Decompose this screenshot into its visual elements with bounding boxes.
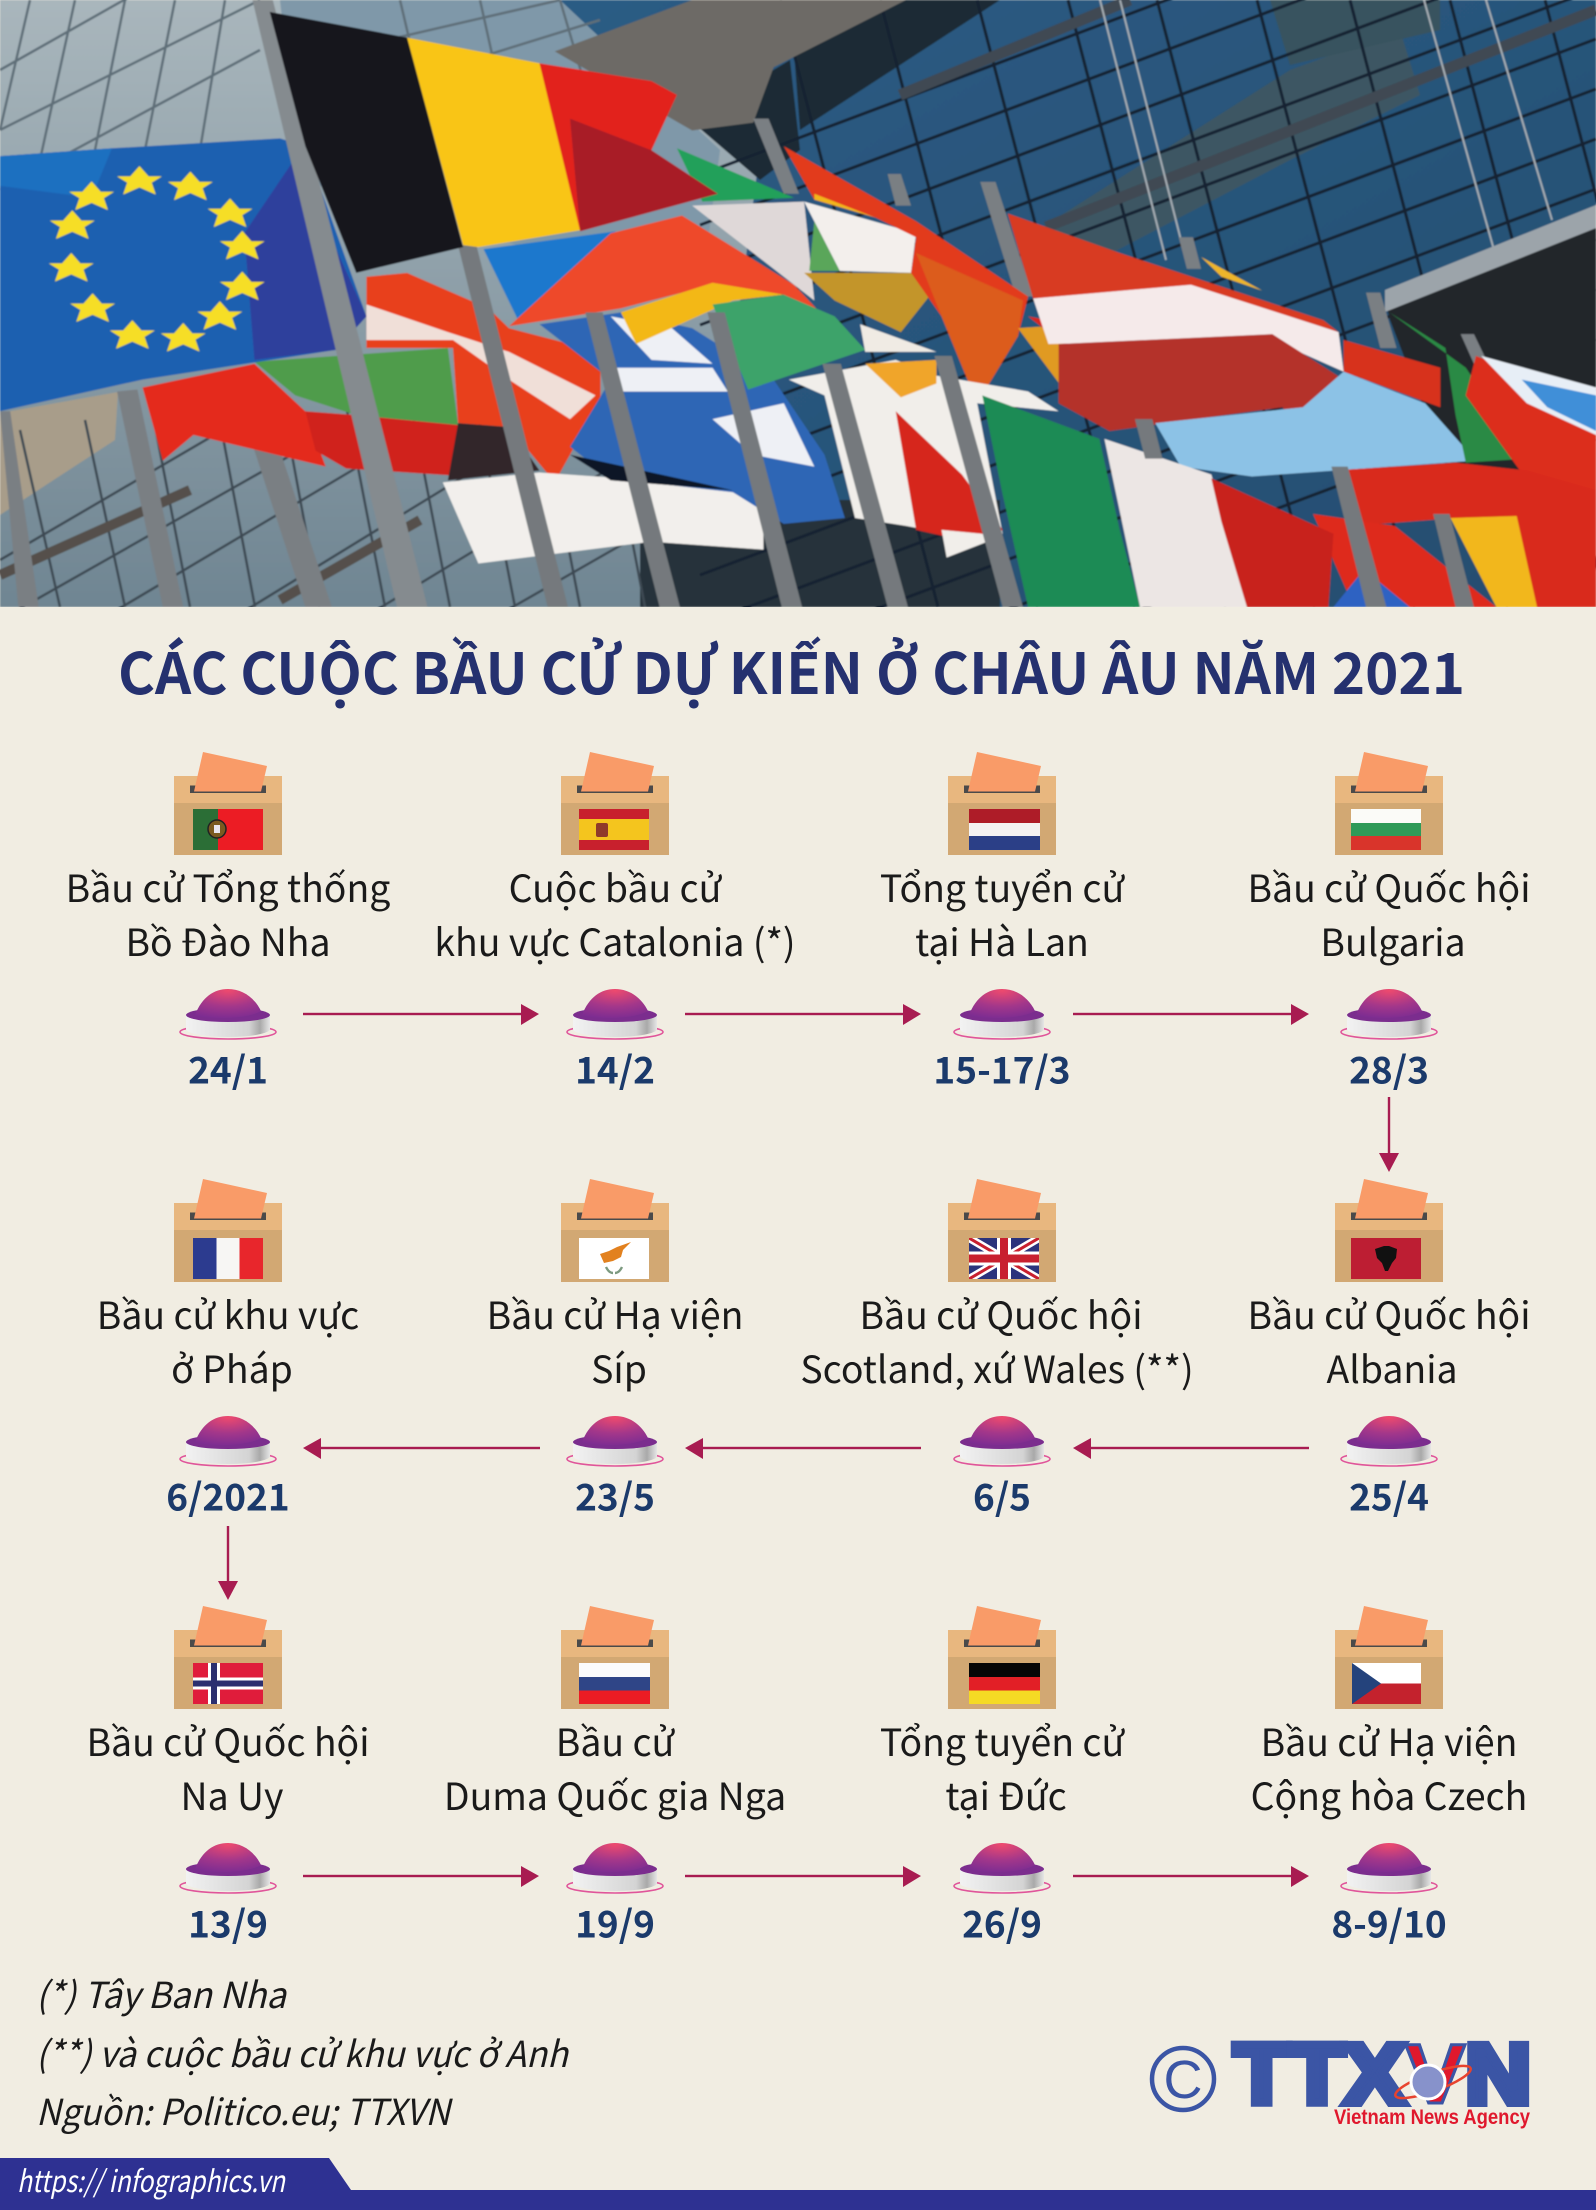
logo: TTXVN xyxy=(1152,2027,1531,2129)
election: Cyprus xyxy=(487,1179,743,1522)
label: Bầu cử Hạ viện xyxy=(487,1286,743,1340)
label: tại Hà Lan xyxy=(915,913,1089,967)
election: Russia xyxy=(444,1606,786,1948)
date: 8-9/10 xyxy=(1331,1894,1447,1948)
footnote: UK: (**) và cuộc bầu cử khu vực ở Anh xyxy=(36,2026,570,2078)
ballot box icon with Dutch flag xyxy=(948,752,1056,855)
label: Bầu cử Tổng thống xyxy=(66,859,390,913)
label: Bầu cử Hạ viện xyxy=(1261,1713,1517,1767)
ballot box icon with Cypriot flag xyxy=(561,1179,669,1282)
date: 6/5 xyxy=(973,1468,1031,1522)
label: Síp xyxy=(591,1340,647,1394)
arrow xyxy=(685,1438,921,1459)
ballot box icon with German flag xyxy=(948,1606,1056,1709)
label: Scotland, xứ Wales (**) xyxy=(800,1340,1194,1394)
ballot box icon with Bulgarian flag xyxy=(1335,752,1443,855)
date marker xyxy=(954,989,1050,1039)
date: 13/9 xyxy=(188,1894,268,1948)
arrow xyxy=(218,1526,238,1600)
label: Bầu cử xyxy=(556,1713,676,1767)
ballot box icon with Norwegian flag xyxy=(174,1606,282,1709)
date marker xyxy=(180,1843,276,1893)
copyright mark xyxy=(1152,2048,1214,2110)
label: Cộng hòa Czech xyxy=(1251,1767,1527,1821)
election: France xyxy=(97,1179,359,1522)
label: Bulgaria xyxy=(1320,913,1466,967)
election: Catalonia xyxy=(434,752,796,1094)
date marker xyxy=(180,989,276,1039)
label: Bầu cử khu vực xyxy=(97,1286,359,1340)
ballot box icon with Spanish flag xyxy=(561,752,669,855)
ballot box icon with UK flag xyxy=(948,1179,1056,1282)
date: 15-17/3 xyxy=(933,1040,1071,1094)
label: Bồ Đào Nha xyxy=(125,913,331,967)
background poles xyxy=(0,119,1488,607)
election: Portugal xyxy=(66,752,390,1094)
election: Germany xyxy=(880,1606,1125,1948)
foreground poles xyxy=(458,245,1474,607)
date marker xyxy=(567,1843,663,1893)
building facade xyxy=(0,0,1596,607)
ballot box icon with French flag xyxy=(174,1179,282,1282)
back flags xyxy=(143,364,326,467)
arrow xyxy=(303,1866,539,1887)
election: Albania xyxy=(1247,1179,1531,1522)
date: 26/9 xyxy=(962,1894,1042,1948)
label: ở Pháp xyxy=(171,1340,293,1394)
date marker xyxy=(954,1843,1050,1893)
date: 28/3 xyxy=(1349,1040,1429,1094)
label: tại Đức xyxy=(945,1767,1067,1821)
label: Na Uy xyxy=(181,1767,283,1821)
date marker xyxy=(954,1416,1050,1466)
tagline: Vietnam News Agency xyxy=(1334,2106,1530,2129)
wordmark: TTXVN xyxy=(1234,2027,1531,2121)
footer bar xyxy=(0,2157,1596,2210)
arrow xyxy=(1379,1097,1399,1172)
main pole xyxy=(252,0,428,607)
date marker xyxy=(567,989,663,1039)
EU flag xyxy=(0,138,366,411)
date: 14/2 xyxy=(575,1040,655,1094)
label: Bầu cử Quốc hội xyxy=(1247,859,1531,913)
arrow xyxy=(1073,1438,1309,1459)
date marker xyxy=(1341,1416,1437,1466)
label: Tổng tuyển cử xyxy=(880,859,1125,913)
structural beams xyxy=(900,0,1596,227)
arrow xyxy=(685,1866,921,1887)
ballot box icon with Russian flag xyxy=(561,1606,669,1709)
arrow xyxy=(1073,1866,1309,1887)
election: Netherlands xyxy=(880,752,1125,1094)
date: 19/9 xyxy=(575,1894,655,1948)
Belgian flag xyxy=(270,12,463,273)
label: Cuộc bầu cử xyxy=(509,859,723,913)
footnotes and source xyxy=(36,1967,570,2136)
label: Duma Quốc gia Nga xyxy=(444,1767,786,1821)
copyright mark: C xyxy=(1164,2050,1202,2110)
ballot box icon with Czech flag xyxy=(1335,1606,1443,1709)
arrow xyxy=(303,1004,539,1025)
label: Bầu cử Quốc hội xyxy=(1247,1286,1531,1340)
photo: EU flags in front of parliament building xyxy=(0,0,1596,607)
source: Nguồn: Politico.eu; TTXVN xyxy=(36,2084,453,2136)
arrow xyxy=(1073,1004,1309,1025)
footnote: Spain: (*) Tây Ban Nha xyxy=(36,1967,288,2019)
election: Norway xyxy=(86,1606,370,1948)
label: Tổng tuyển cử xyxy=(880,1713,1125,1767)
date: 24/1 xyxy=(188,1040,268,1094)
date: 6/2021 xyxy=(166,1468,290,1522)
label: Bầu cử Quốc hội xyxy=(859,1286,1143,1340)
cyprus and ireland flags xyxy=(789,360,1059,534)
website url: https:// infographics.vn xyxy=(17,2157,286,2201)
window mullions left xyxy=(0,411,646,607)
date marker xyxy=(1341,989,1437,1039)
label: Albania xyxy=(1326,1340,1458,1394)
date: 23/5 xyxy=(575,1468,655,1522)
date marker xyxy=(1341,1843,1437,1893)
label: khu vực Catalonia (*) xyxy=(434,913,796,967)
label: Bầu cử Quốc hội xyxy=(86,1713,370,1767)
date marker xyxy=(567,1416,663,1466)
date: 25/4 xyxy=(1349,1468,1429,1522)
arrow xyxy=(303,1438,540,1459)
arrow xyxy=(685,1004,921,1025)
election: Czech Republic xyxy=(1251,1606,1527,1948)
election: Scotland and Wales xyxy=(800,1179,1194,1522)
ballot box icon with Portuguese flag xyxy=(174,752,282,855)
date marker xyxy=(180,1416,276,1466)
election: Bulgaria xyxy=(1247,752,1531,1094)
title: CÁC CUỘC BẦU CỬ DỰ KIẾN Ở CHÂU ÂU NĂM 2021 xyxy=(118,629,1465,711)
window mullions right xyxy=(699,0,1596,607)
ballot box icon with Albanian flag xyxy=(1335,1179,1443,1282)
globe xyxy=(1392,2060,1474,2104)
